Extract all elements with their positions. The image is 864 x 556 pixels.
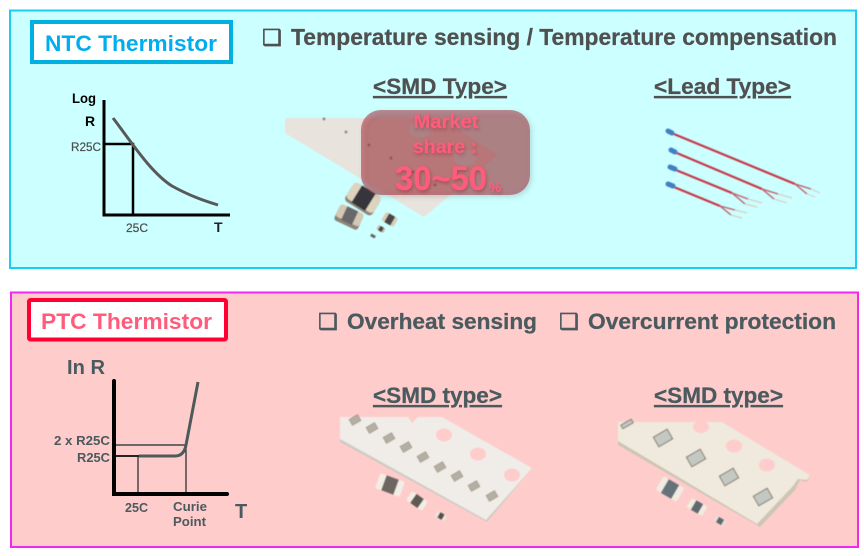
SMD type label: <SMD Type> <box>373 74 507 99</box>
PTC first SMD type label: <SMD type> <box>373 383 502 408</box>
panel: NTC thermistor <box>10 10 856 268</box>
NTC resistance-temperature chart: R <box>85 113 95 129</box>
NTC lead type wires photo <box>668 131 820 218</box>
NTC resistance-temperature chart: 25C <box>126 221 148 235</box>
PTC resistance-temperature chart: In R <box>67 357 106 379</box>
PTC applications heading: Overheat sensing <box>347 309 537 334</box>
NTC title box: NTC Thermistor <box>45 31 217 56</box>
NTC resistance-temperature chart <box>71 90 230 235</box>
NTC applications heading: Temperature sensing / Temperature compensation <box>291 24 837 50</box>
market share callout: share : <box>413 137 477 158</box>
NTC resistance-temperature chart: R25C <box>71 140 101 154</box>
panel: PTC thermistor <box>11 292 858 547</box>
PTC title box: PTC Thermistor <box>41 309 212 334</box>
NTC resistance-temperature chart: Log <box>72 90 96 106</box>
market share callout: 30~50 <box>395 160 487 198</box>
NTC SMD tape and chips photo <box>285 118 498 239</box>
PTC resistance-temperature chart: 2 x R25C <box>54 434 110 448</box>
PTC title box <box>29 300 226 340</box>
market share callout <box>361 110 530 198</box>
PTC resistance-temperature chart: R25C <box>77 451 110 465</box>
PTC applications heading: ❑ <box>559 310 579 335</box>
NTC title box <box>32 22 231 62</box>
PTC resistance-temperature chart <box>54 357 247 529</box>
PTC second SMD type label: <SMD type> <box>654 383 783 408</box>
market share callout: % <box>489 179 502 195</box>
PTC applications heading <box>318 309 836 335</box>
NTC applications heading: ❑ <box>262 26 282 51</box>
Lead type label: <Lead Type> <box>654 74 791 99</box>
PTC resistance-temperature chart: 25C <box>125 501 148 515</box>
market share callout: Market <box>414 112 479 133</box>
PTC applications heading: ❑ <box>318 310 338 335</box>
PTC applications heading: Overcurrent protection <box>588 309 836 334</box>
NTC resistance-temperature chart: T <box>214 219 223 235</box>
PTC resistance-temperature chart: T <box>235 501 247 523</box>
PTC second SMD tape and chips photo <box>618 419 810 527</box>
PTC first SMD tape and chips photo <box>340 414 532 522</box>
PTC resistance-temperature chart: Curie <box>173 500 207 514</box>
PTC resistance-temperature chart: Point <box>173 515 207 529</box>
